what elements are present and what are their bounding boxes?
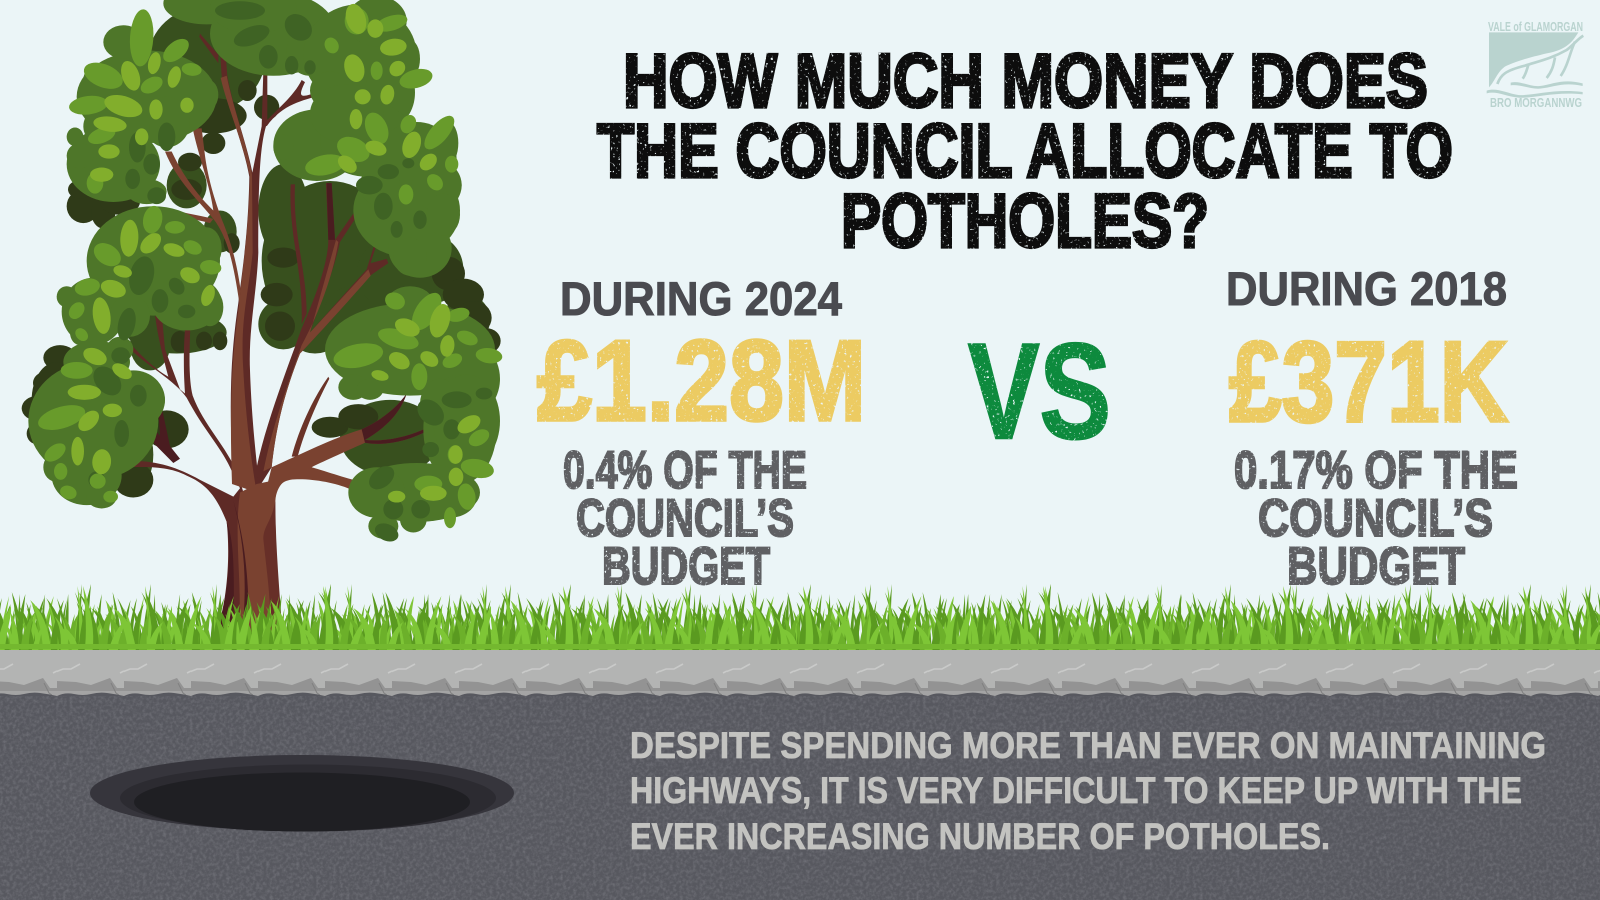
title: [597, 39, 1453, 264]
tree illustration: [22, 0, 503, 636]
budget share 0.17%: COUNCIL’S: [1258, 489, 1493, 548]
logo: Vale of Glamorgan: [1487, 20, 1583, 110]
figure: £1.28M: £1.28M: [537, 318, 866, 445]
figure: £371K: £371K: [1229, 319, 1508, 446]
back foliage: [22, 6, 501, 498]
foliage clusters: [28, 0, 500, 539]
kerb: [0, 649, 1600, 696]
foliage shading: [88, 1, 492, 544]
panel: 2018 spending: [1226, 262, 1518, 596]
budget share 0.4%: COUNCIL’S: [576, 489, 794, 548]
panel: 2024 spending: [537, 272, 866, 596]
title: HOW MUCH MONEY DOES: [623, 39, 1428, 124]
budget share 0.4%: [563, 441, 807, 596]
grass: [0, 578, 1600, 650]
text block: conclusion: [630, 725, 1546, 857]
heading: during 2018: DURING 2018: [1226, 262, 1507, 315]
budget share 0.4%: 0.4% OF THE: [563, 441, 807, 500]
versus label: VS: [968, 315, 1111, 467]
budget share 0.4%: BUDGET: [602, 537, 770, 596]
highlight leaves: [68, 0, 482, 503]
budget share 0.17%: BUDGET: [1287, 537, 1465, 596]
title: POTHOLES?: [841, 179, 1209, 264]
heading: during 2024: DURING 2024: [560, 272, 842, 325]
road surface: [0, 690, 1600, 900]
budget share 0.17%: [1234, 441, 1518, 596]
lighter leaves: [36, 8, 503, 528]
trunk and branches: [119, 25, 429, 636]
pothole: [90, 755, 514, 832]
budget share 0.17%: 0.17% OF THE: [1234, 441, 1518, 500]
text block: conclusion: EVER INCREASING NUMBER OF POTHOLES.: [630, 816, 1330, 857]
